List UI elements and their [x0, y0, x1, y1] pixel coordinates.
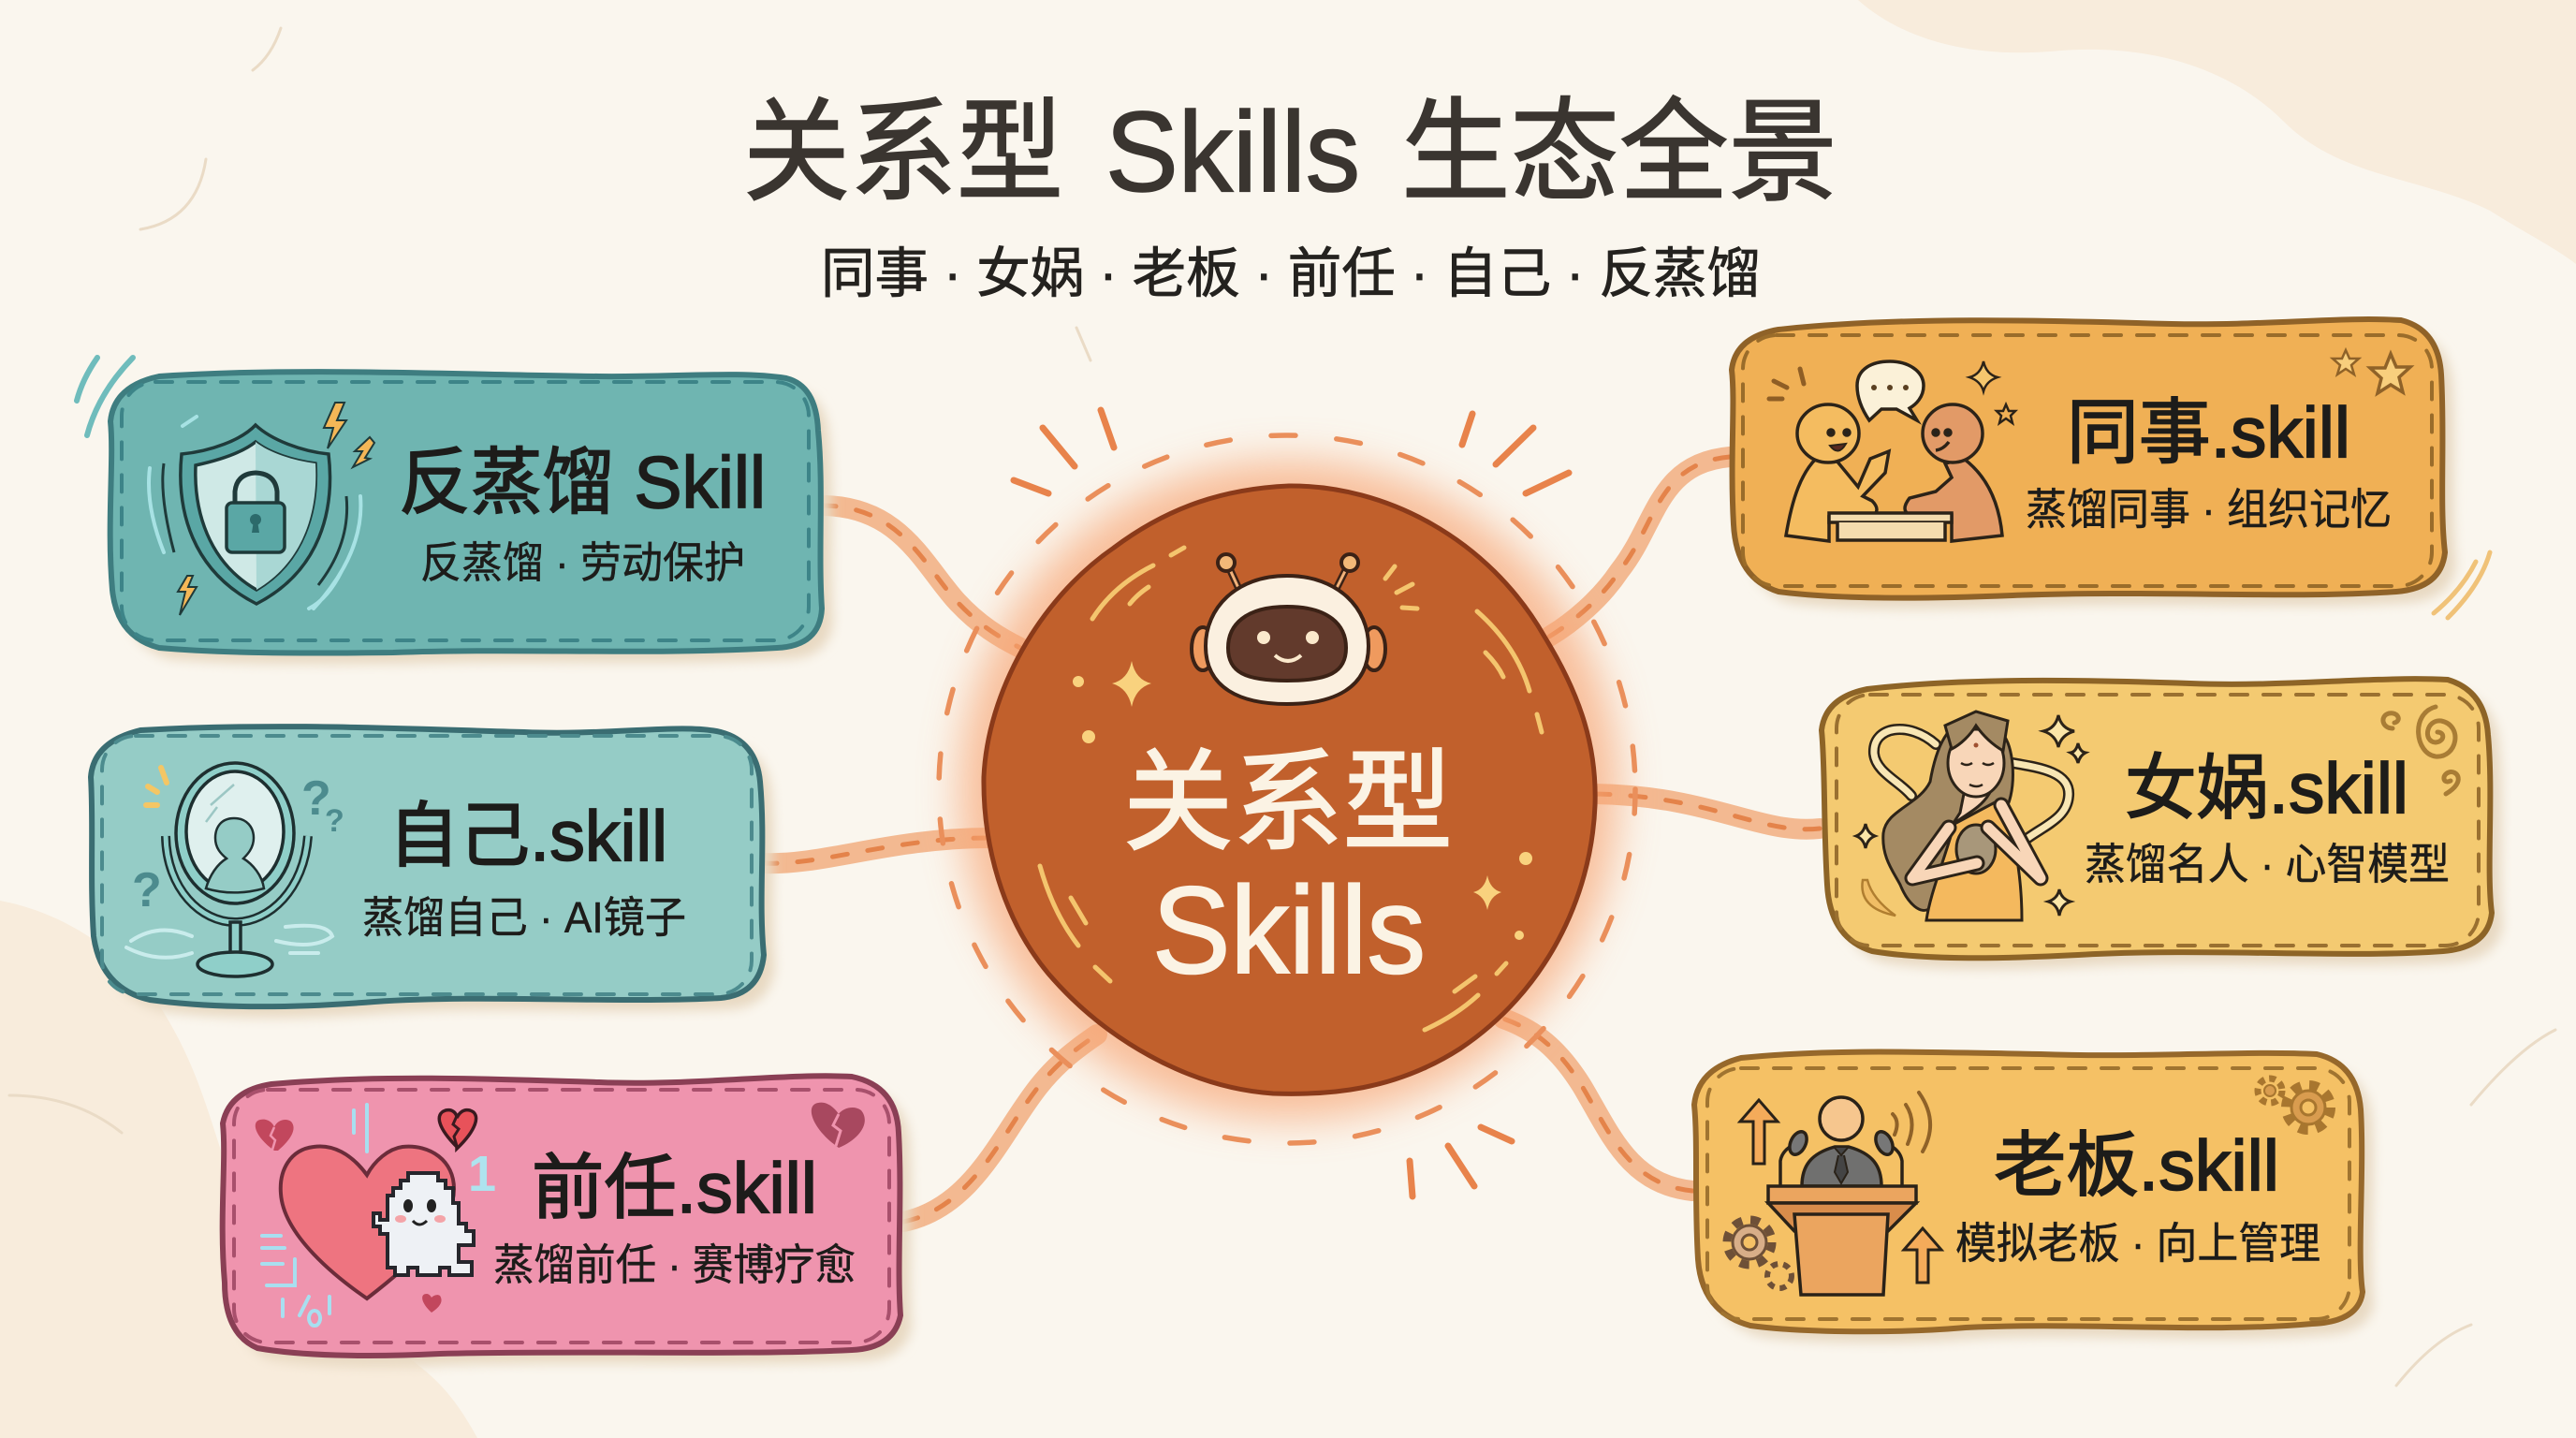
panel subtitle: 蒸馏自己 · AI镜子: [362, 893, 686, 942]
hub label: 关系型: [1123, 741, 1453, 865]
panel title: 反蒸馏 Skill: [399, 441, 766, 523]
icon: two colleagues talking: [1769, 350, 2410, 541]
text: binary digit: 1: [468, 1146, 496, 1202]
panel: 女娲.skill: [1822, 679, 2503, 969]
dashed ring: [939, 435, 1635, 1143]
central hub: [939, 410, 1635, 1196]
hub label: Skills: [1152, 861, 1426, 999]
icon: swirls: [2383, 707, 2458, 794]
title: [743, 88, 1837, 215]
hub glow: [959, 461, 1618, 1120]
panel title: 同事.skill: [2067, 393, 2350, 473]
title: Skills: [1105, 88, 1360, 215]
rays: [1014, 410, 1569, 1196]
panel: 反蒸馏 Skill: [77, 358, 833, 664]
panel title: 老板.skill: [1994, 1126, 2279, 1206]
panel: 自己.skill: [91, 726, 775, 1018]
panel: 同事.skill: [1732, 319, 2490, 618]
icon: shield with lock: [77, 358, 374, 615]
panel subtitle: 蒸馏前任 · 赛博疗愈: [493, 1240, 856, 1289]
icon: Nuwa figure: [1856, 712, 2086, 920]
hub sparkles and arcs: [1040, 548, 1542, 1030]
panel subtitle: 反蒸馏 · 劳动保护: [420, 538, 745, 587]
panel: 老板.skill: [1694, 1052, 2374, 1343]
panel subtitle: 蒸馏同事 · 组织记忆: [2026, 485, 2392, 534]
decoration: motion strokes: [2434, 552, 2490, 618]
icon: up arrows: [1740, 1100, 1941, 1283]
panel: 前任.skill: [223, 1076, 912, 1367]
icon: question marks: [132, 771, 344, 917]
icon: broken hearts: [256, 1103, 865, 1313]
panel subtitle: 蒸馏名人 · 心智模型: [2085, 840, 2450, 888]
icon: robot: [1192, 554, 1385, 704]
icon: mirror: [126, 763, 332, 976]
icon: gears: [1727, 1078, 2331, 1288]
icon: question marks: ?: [132, 863, 162, 917]
icon: question marks: ?: [301, 771, 331, 826]
panel subtitle: 模拟老板 · 向上管理: [1955, 1219, 2320, 1268]
hub label: [1123, 741, 1453, 999]
subtitle: 同事 · 女娲 · 老板 · 前任 · 自己 · 反蒸馏: [821, 243, 1761, 304]
icon: pixel ghost: [373, 1173, 474, 1275]
title: 生态全景: [1401, 90, 1837, 215]
icon: heart: [281, 1146, 454, 1299]
panel title: 女娲.skill: [2125, 749, 2408, 829]
icon: boss at podium: [1768, 1097, 1916, 1295]
title: 关系型: [743, 90, 1063, 215]
panel title: 自己.skill: [388, 797, 667, 876]
hub disc: [984, 486, 1595, 1093]
panel title: 前任.skill: [532, 1149, 817, 1228]
connectors: [762, 457, 1820, 1222]
icon: question marks: ?: [325, 803, 344, 839]
icon: sound waves: [1893, 1093, 1930, 1152]
icon: digital circuit marks: [262, 1105, 367, 1326]
